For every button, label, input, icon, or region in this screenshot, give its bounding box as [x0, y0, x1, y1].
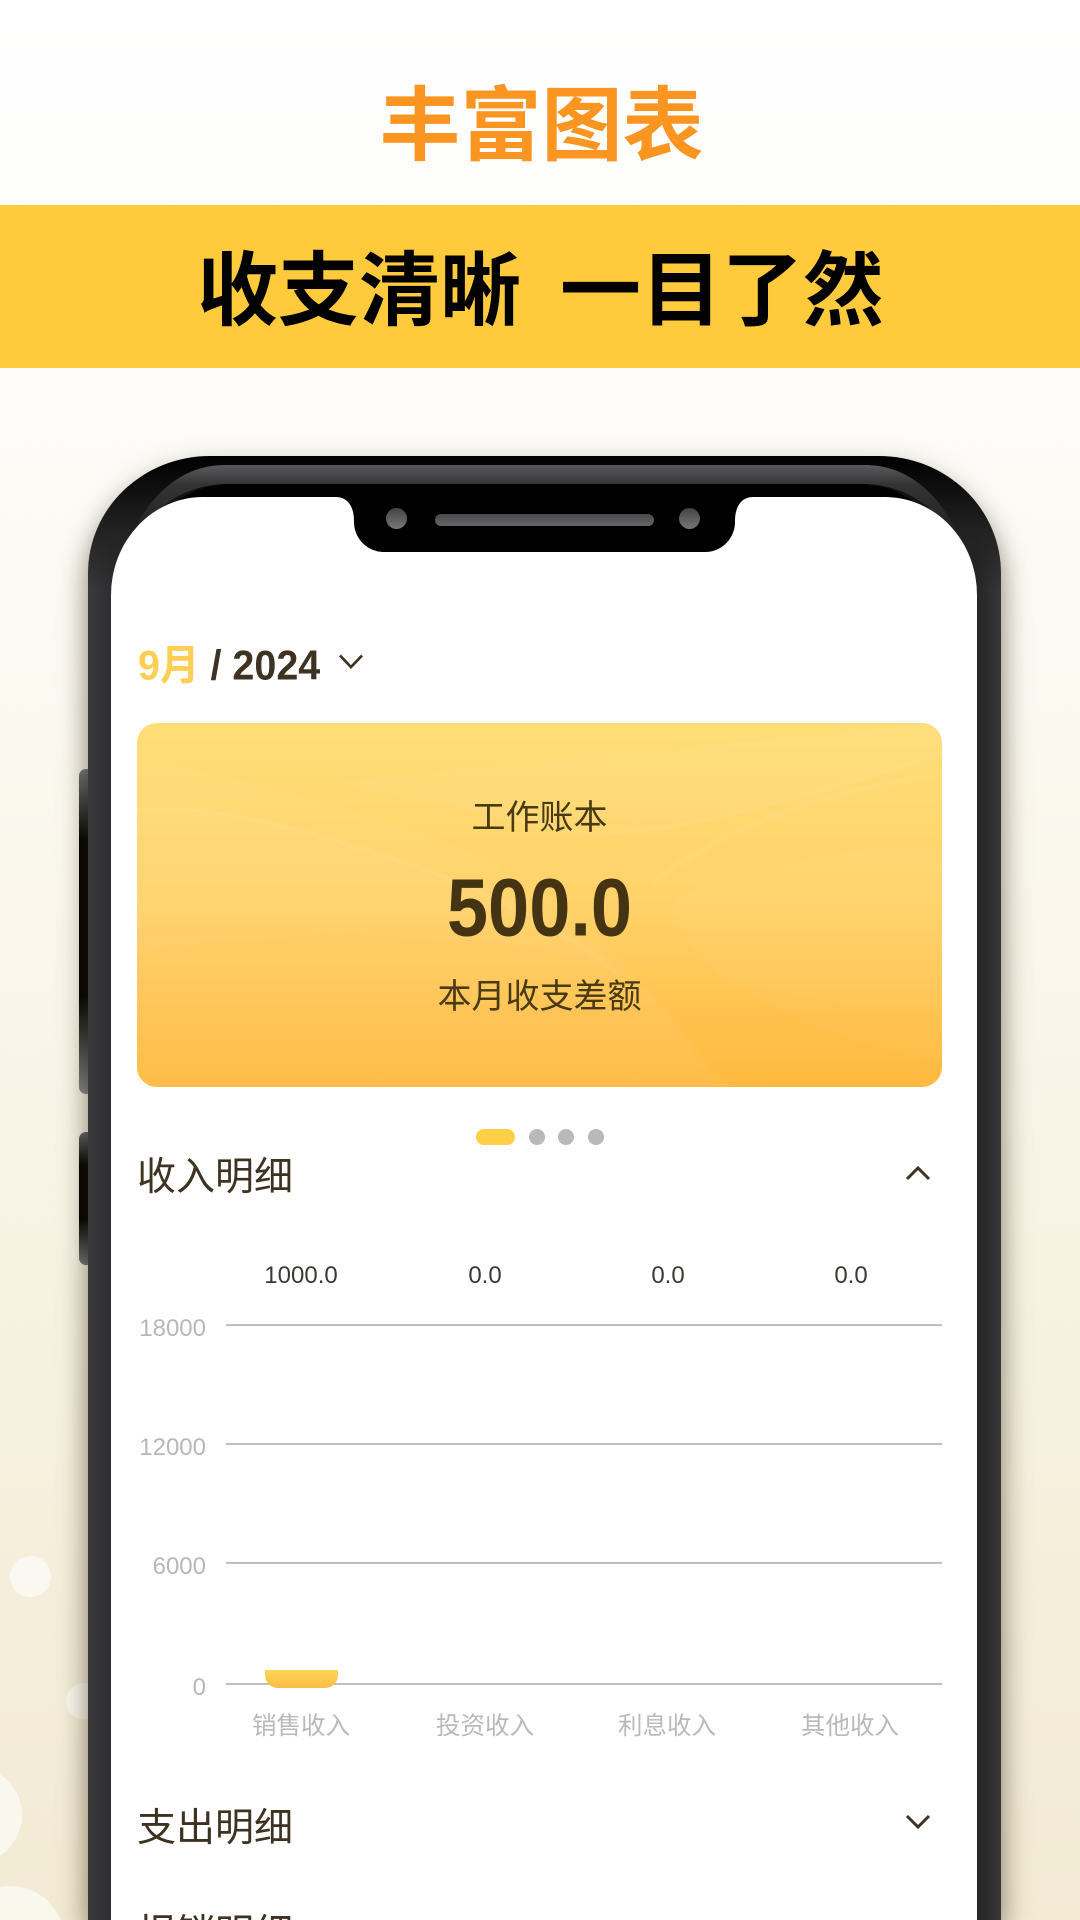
- title: 丰富图表: [379, 61, 704, 178]
- front camera left: [386, 508, 407, 529]
- side button: volume up: [79, 769, 91, 1094]
- bezel highlight and inner rim: [140, 465, 950, 522]
- icon: chevron down: [906, 1815, 930, 1829]
- phone mockup: [88, 456, 1001, 1920]
- screen: [111, 497, 977, 1920]
- notch: [354, 484, 735, 552]
- card wave pattern: [137, 754, 942, 1087]
- chart value labels: 1000.0: [264, 1262, 338, 1289]
- banner text: [197, 226, 884, 343]
- x axis labels: 利息收入: [618, 1707, 716, 1742]
- balance card: [137, 723, 942, 1087]
- balance value: 500.0: [447, 862, 632, 953]
- notch corner left: [336, 497, 354, 520]
- grid lines: [226, 1324, 942, 1685]
- x axis labels: 其他收入: [801, 1707, 899, 1742]
- x axis labels: [252, 1707, 899, 1742]
- banner text: 收支清晰: [197, 226, 521, 343]
- x axis labels: 销售收入: [252, 1707, 350, 1742]
- y axis labels: 12000: [139, 1434, 206, 1461]
- expense heading: 支出明细: [137, 1797, 293, 1853]
- bar: sales income: [265, 1670, 338, 1688]
- sensor right: [679, 508, 700, 529]
- month selector: 9月 / 2024: [138, 643, 320, 689]
- yellow banner: [0, 205, 1080, 368]
- x axis labels: 投资收入: [436, 1707, 534, 1742]
- income bar chart: [139, 1262, 942, 1742]
- y axis labels: 18000: [139, 1315, 206, 1342]
- account name: 工作账本: [472, 790, 608, 839]
- chart value labels: 0.0: [834, 1262, 868, 1289]
- carousel dots: [476, 1129, 604, 1145]
- y axis labels: 6000: [153, 1553, 206, 1580]
- icon: chevron up: [906, 1166, 930, 1180]
- icon: chevron down: [339, 654, 363, 669]
- income heading: 收入明细: [137, 1146, 293, 1202]
- chart value labels: [264, 1262, 868, 1289]
- background bubbles: [0, 1556, 88, 1920]
- side button: volume down: [79, 1132, 91, 1265]
- banner text: 一目了然: [560, 226, 884, 343]
- y axis labels: [139, 1315, 206, 1701]
- y axis labels: 0: [193, 1674, 206, 1701]
- balance caption: 本月收支差额: [438, 969, 642, 1018]
- chart value labels: 0.0: [651, 1262, 685, 1289]
- speaker: [435, 514, 654, 526]
- notch corner right: [735, 497, 752, 520]
- chart value labels: 0.0: [468, 1262, 502, 1289]
